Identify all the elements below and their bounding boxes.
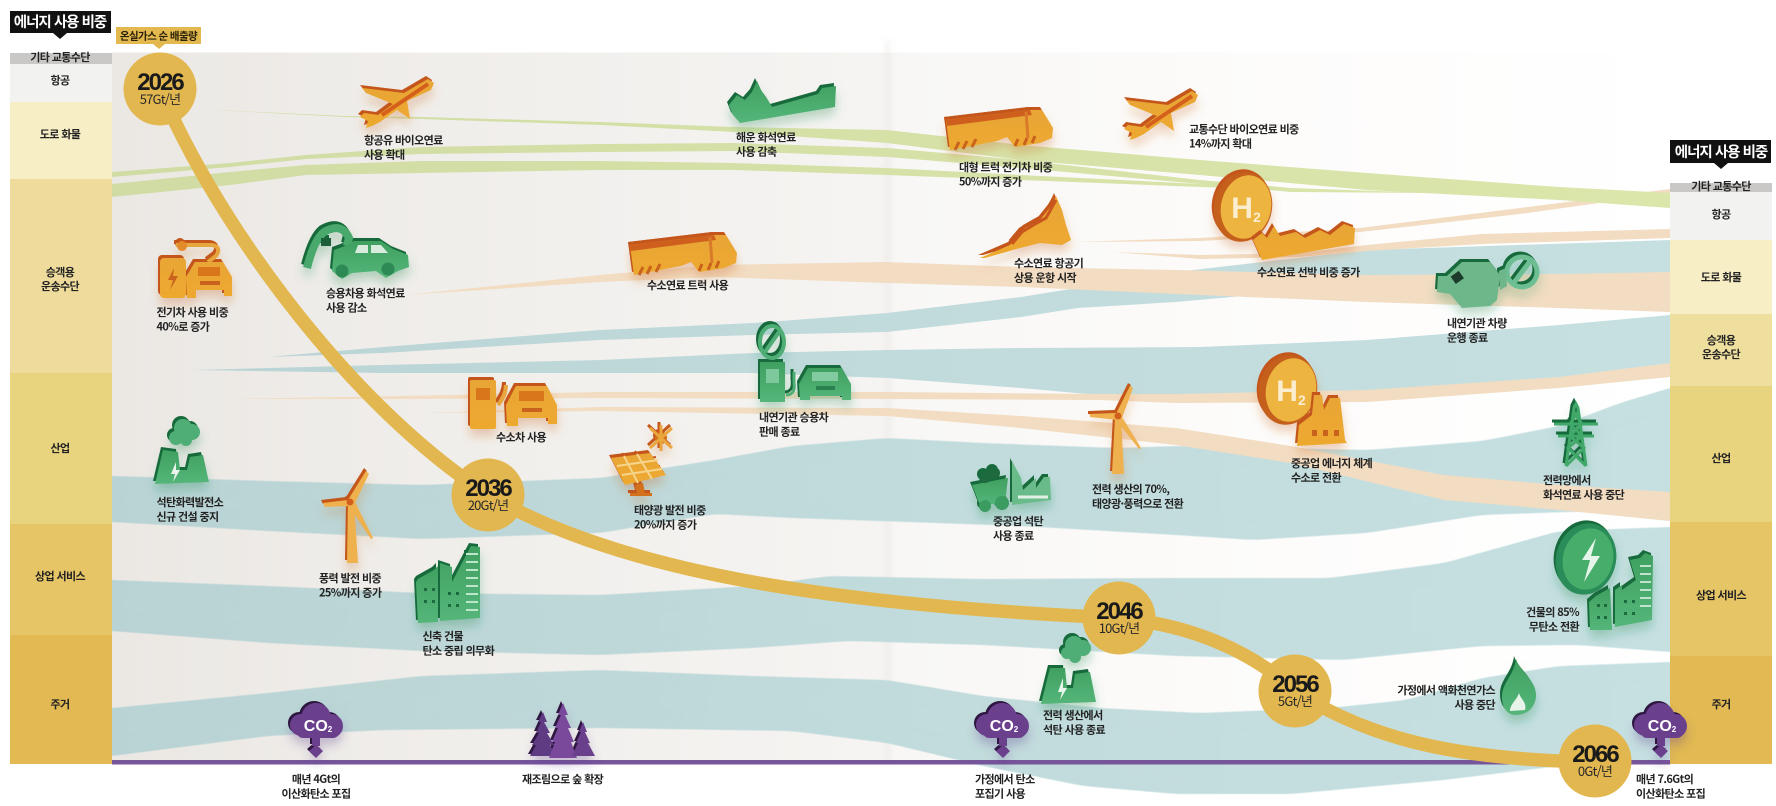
right column: energy share: 상업 서비스 xyxy=(1696,587,1747,603)
label: 전력 생산에서 xyxy=(1043,707,1103,723)
label: 전력 생산의 70%, xyxy=(1092,481,1169,497)
right column: energy share: 기타 교통수단 xyxy=(1691,178,1751,194)
label: 전력망에서 xyxy=(1543,472,1591,488)
right column: energy share: 산업 xyxy=(1711,450,1731,466)
label: 화석연료 사용 중단 xyxy=(1543,486,1625,502)
label: 재조림으로 숲 확장 xyxy=(522,771,604,787)
label: 20%까지 증가 xyxy=(634,516,697,532)
icon: hydrogen coin 2: 2 xyxy=(1298,392,1306,408)
icon: hydrogen coin: 2 xyxy=(1253,209,1261,225)
milestone 2026: 57Gt/년 xyxy=(140,89,180,108)
label: 수소차 사용 xyxy=(496,429,547,445)
icon: hydrogen car orange xyxy=(470,380,557,429)
ribbon group: passenger teal band upper xyxy=(268,240,1670,357)
icon: gas pump and car with prohibition xyxy=(760,326,851,402)
milestone 2026: 2026 xyxy=(137,69,184,96)
milestone 2036: 20Gt/년 xyxy=(468,495,508,514)
ribbon group: commercial teal band xyxy=(40,524,1740,660)
label: 탄소 중립 의무화 xyxy=(422,642,495,658)
milestone 2046: 10Gt/년 xyxy=(1099,618,1139,637)
left column: energy share: 기타 교통수단 xyxy=(30,49,90,65)
label: 태양광 발전 비중 xyxy=(634,502,706,518)
milestone 2066: 0Gt/년 xyxy=(1578,761,1612,780)
label: 사용 확대 xyxy=(364,146,405,162)
label: 수소연료 항공기 xyxy=(1014,255,1083,271)
heading: net greenhouse gas emissions xyxy=(116,27,201,49)
right column: energy share: 운송수단 xyxy=(1702,346,1741,362)
label: 50%까지 증가 xyxy=(959,174,1022,190)
label: 전기차 사용 비중 xyxy=(156,304,229,320)
label: 매년 4Gt의 xyxy=(292,771,340,787)
label: 해운 화석연료 xyxy=(736,129,796,145)
icon: hydrogen ship orange xyxy=(1253,224,1355,260)
milestone 2036 xyxy=(452,458,524,532)
background panel xyxy=(112,52,1670,762)
label: 상용 운항 시작 xyxy=(1014,270,1077,286)
icon: hydrogen factory orange xyxy=(1297,395,1347,446)
label: 태양광·풍력으로 전환 xyxy=(1092,496,1184,512)
label: 항공유 바이오연료 xyxy=(364,132,443,148)
emissions curve xyxy=(160,88,1595,762)
left column: energy share: 산업 xyxy=(50,440,70,456)
label: 풍력 발전 비중 xyxy=(319,570,382,586)
label: 40%로 증가 xyxy=(156,318,210,334)
label: 신축 건물 xyxy=(422,628,464,644)
milestone 2046 xyxy=(1082,582,1156,654)
icon: CO2 cloud 3 xyxy=(1634,703,1687,758)
label: 매년 7.6Gt의 xyxy=(1636,771,1693,787)
label: 가정에서 액화천연가스 xyxy=(1397,682,1495,698)
ribbon group: hydrogen ship peach band xyxy=(1113,229,1670,259)
right column: energy share: 도로 화물 xyxy=(1701,269,1742,285)
icon: solar panel orange xyxy=(611,425,672,496)
label: 판매 종료 xyxy=(759,424,800,440)
icon: ship green xyxy=(729,81,836,123)
icon: CO2 cloud 2: CO xyxy=(990,718,1014,735)
left column: energy share: 항공 xyxy=(50,72,70,88)
heading: right energy share: 에너지 사용 비중 xyxy=(1675,141,1768,162)
milestone 2056: 2056 xyxy=(1272,671,1319,698)
icon: internal combustion engine with prohibition xyxy=(1437,257,1537,308)
left column: energy share: 승객용 xyxy=(46,264,75,280)
ribbon group: heavy industry peach band xyxy=(423,407,1670,521)
icon: green energy coin xyxy=(1548,517,1624,601)
heading: right energy share xyxy=(1670,140,1771,169)
icon: CO2 cloud 3: 2 xyxy=(1672,725,1677,734)
label: 25%까지 증가 xyxy=(319,584,382,600)
label: 석탄화력발전소 xyxy=(156,494,224,510)
icon: hydrogen coin 2: H xyxy=(1276,375,1298,408)
label: 사용 중단 xyxy=(1454,696,1495,712)
label: 이산화탄소 포집 xyxy=(281,786,351,802)
icon: wind turbine orange 2 xyxy=(1090,386,1141,474)
label: 건물의 85% xyxy=(1526,604,1580,620)
ribbon group: hydrogen aviation peach band xyxy=(1074,189,1670,242)
icon: electric car and battery xyxy=(160,241,232,298)
ribbon group: residential teal band xyxy=(40,660,1740,794)
icon: green buildings right xyxy=(1589,553,1653,630)
right column: energy share: 승객용 xyxy=(1707,332,1736,348)
milestone 2056: 5Gt/년 xyxy=(1278,691,1312,710)
ribbon group: industry teal band xyxy=(40,370,1740,540)
milestone 2066: 2066 xyxy=(1572,741,1619,768)
icon: coal power plant green xyxy=(155,419,209,484)
milestone 2066 xyxy=(1558,724,1632,798)
purple carbon capture line xyxy=(112,760,1670,764)
icon: CO2 cloud 2 xyxy=(976,703,1029,758)
icon: coal cart and factory green xyxy=(972,461,1051,512)
label: 대형 트럭 전기차 비중 xyxy=(959,159,1053,175)
label: 승용차용 화석연료 xyxy=(326,285,405,301)
icon: hydrogen truck orange xyxy=(630,235,737,275)
heading: left energy share xyxy=(10,11,111,39)
ribbon group: hydrogen truck peach band xyxy=(406,262,1670,312)
label: 내연기관 승용차 xyxy=(759,409,829,425)
label: 수소연료 선박 비중 증가 xyxy=(1257,264,1360,280)
ribbon group: passenger fuel green band xyxy=(112,161,1367,197)
icon: coal power plant green 2 xyxy=(1041,636,1096,704)
heading: net greenhouse gas emissions: 온실가스 순 배출량 xyxy=(120,28,198,44)
icon: power pylon green xyxy=(1554,404,1598,466)
icon: flame green xyxy=(1502,659,1536,715)
label: 중공업 에너지 체계 xyxy=(1291,455,1373,471)
milestone 2056 xyxy=(1258,654,1332,728)
label: 신규 건설 중지 xyxy=(156,508,219,524)
icon: hydrogen coin xyxy=(1207,167,1279,247)
ribbon group: hydrogen car peach band xyxy=(228,363,1670,403)
ribbon group: road freight green band xyxy=(112,143,1436,193)
left column: energy share: 상업 서비스 xyxy=(35,568,86,584)
icon: hydrogen coin 2 xyxy=(1252,350,1324,430)
icon: CO2 cloud 1: 2 xyxy=(328,725,333,734)
center fold xyxy=(885,40,890,762)
milestone 2046: 2046 xyxy=(1096,598,1143,625)
label: 운행 종료 xyxy=(1447,330,1488,346)
label: 사용 감소 xyxy=(326,300,367,316)
ribbon group: aviation fuel green band xyxy=(195,109,1670,208)
left column: energy share: 도로 화물 xyxy=(40,126,81,142)
milestone 2026 xyxy=(124,52,196,126)
heading: left energy share: 에너지 사용 비중 xyxy=(14,11,107,32)
label: 포집기 사용 xyxy=(975,786,1026,802)
label: 사용 감축 xyxy=(736,144,777,160)
label: 수소연료 트럭 사용 xyxy=(647,277,729,293)
ribbon group: passenger teal band lower xyxy=(193,315,1670,402)
label: 사용 종료 xyxy=(993,528,1034,544)
icon: green buildings xyxy=(416,546,480,623)
icon: CO2 cloud 3: CO xyxy=(1648,718,1672,735)
label: 가정에서 탄소 xyxy=(975,771,1035,787)
icon: hydrogen aircraft orange xyxy=(980,196,1071,258)
icon: plane orange xyxy=(360,79,434,128)
label: 무탄소 전환 xyxy=(1529,618,1579,634)
icon: hydrogen coin: H xyxy=(1231,192,1253,225)
icon: wind turbine orange 1 xyxy=(323,471,373,563)
icon: CO2 cloud 1: CO xyxy=(304,718,328,735)
right column: energy share: 주거 xyxy=(1711,696,1731,712)
icon: CO2 cloud 1 xyxy=(290,703,343,758)
icon: electric truck orange xyxy=(946,110,1053,150)
milestone 2036: 2036 xyxy=(465,475,512,502)
left column: energy share xyxy=(10,49,112,764)
right column: energy share: 항공 xyxy=(1711,206,1731,222)
label: 이산화탄소 포집 xyxy=(1636,786,1705,802)
right column: energy share xyxy=(1670,178,1772,764)
label: 수소로 전환 xyxy=(1291,470,1342,486)
icon: forest purple xyxy=(530,703,595,758)
icon: CO2 cloud 2: 2 xyxy=(1014,725,1019,734)
left column: energy share: 주거 xyxy=(50,696,70,712)
left column: energy share: 운송수단 xyxy=(41,278,80,294)
label: 14%까지 확대 xyxy=(1189,136,1252,152)
label: 석탄 사용 종료 xyxy=(1043,722,1106,738)
label: 중공업 석탄 xyxy=(993,513,1044,529)
label: 내연기관 차량 xyxy=(1447,315,1507,331)
icon: passenger car with fuel nozzle green xyxy=(307,228,409,279)
label: 교통수단 바이오연료 비중 xyxy=(1189,121,1299,137)
icon: plane orange 2 xyxy=(1124,91,1198,140)
